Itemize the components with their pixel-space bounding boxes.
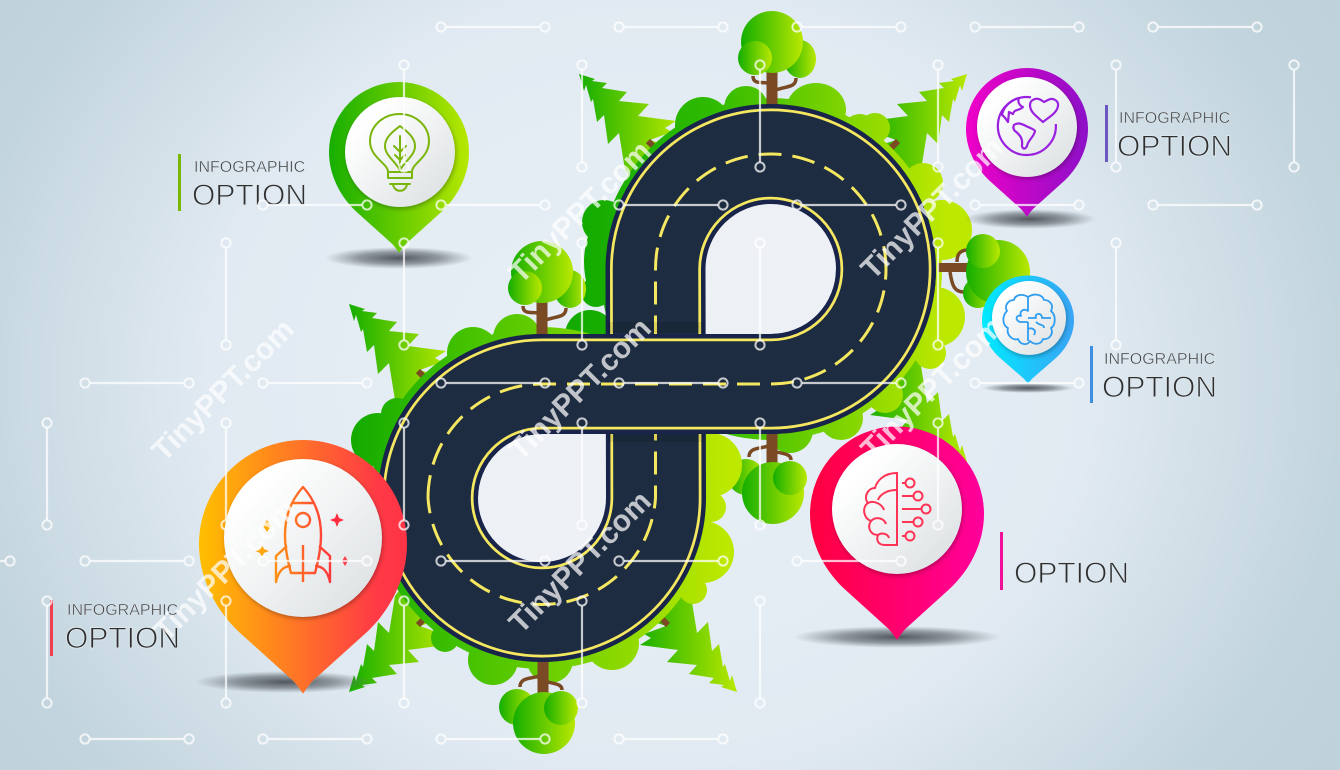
accent bar [1105, 105, 1108, 162]
scenery: lower cluster of pines, bushes and trees [349, 241, 742, 754]
pine tree: lower right [866, 346, 967, 462]
icon: circuit brain [864, 473, 930, 545]
pin shadow [793, 626, 1001, 648]
label: pink option [1000, 532, 1129, 590]
heading: OPTION [1117, 130, 1232, 163]
pin disc [832, 444, 962, 574]
pin: cyan with brain puzzle icon [982, 276, 1074, 393]
heading: OPTION [1102, 371, 1217, 404]
pin disc [992, 281, 1066, 355]
label: magenta option [1105, 105, 1232, 163]
heading: OPTION [65, 622, 180, 655]
label: orange option [50, 600, 180, 656]
heading: OPTION [1014, 557, 1129, 590]
pin disc [345, 97, 455, 207]
watermarks [146, 131, 1010, 648]
tree: lower middle [728, 428, 807, 524]
pin body [329, 82, 469, 253]
heading: OPTION [192, 179, 307, 212]
bushes: upper cluster [565, 83, 972, 453]
pin: orange with rocket icon [195, 440, 407, 694]
accent bar [50, 600, 53, 656]
pin: magenta with earth and heart icon [964, 68, 1096, 229]
label: cyan option [1090, 346, 1217, 404]
pin shadow [325, 247, 473, 269]
caption: INFOGRAPHIC [1104, 351, 1215, 368]
watermarks: TinyPPT.com [503, 485, 658, 640]
pin body [982, 276, 1074, 384]
road: underpass segment [428, 154, 886, 612]
watermarks: TinyPPT.com [148, 493, 303, 648]
pine tree: upper right [866, 74, 967, 190]
pin body [966, 68, 1088, 217]
pin body [199, 440, 407, 694]
icon: rocket [276, 487, 330, 582]
pin disc [977, 77, 1077, 177]
bushes: lower cluster [351, 314, 742, 685]
icon: brain puzzle [1003, 295, 1055, 344]
road: overpass segment [428, 269, 886, 498]
pin: pink with circuit brain icon [793, 426, 1001, 648]
icon: sparkles [255, 513, 348, 566]
caption: INFOGRAPHIC [194, 159, 305, 176]
tree: top [738, 11, 816, 110]
pin disc [224, 459, 382, 617]
caption: INFOGRAPHIC [1119, 110, 1230, 127]
pine tree: bottom left [349, 576, 450, 692]
tree: bottom [499, 658, 578, 754]
pin shadow [982, 383, 1074, 393]
label: green option [178, 154, 307, 212]
watermarks: TinyPPT.com [855, 311, 1010, 466]
accent bar [178, 154, 181, 211]
watermarks: TinyPPT.com [503, 312, 658, 467]
pine tree: upper left [579, 74, 680, 190]
icon: light bulb with leaf [370, 114, 429, 191]
tree: upper left [508, 241, 586, 340]
accent bar [1000, 532, 1003, 590]
watermarks: TinyPPT.com [146, 313, 301, 468]
road: figure-eight track [428, 154, 886, 612]
pin: green with bulb icon [325, 82, 473, 269]
pin body [810, 426, 984, 640]
icon: earth with heart [998, 97, 1058, 155]
crossing shade [608, 322, 705, 442]
watermarks: TinyPPT.com [503, 135, 658, 290]
pine tree: bottom right [636, 576, 737, 692]
tree: right [938, 234, 1030, 308]
pin shadow [964, 209, 1096, 229]
watermarks: TinyPPT.com [855, 131, 1010, 286]
scenery: upper cluster of pines, bushes and trees [565, 11, 1030, 524]
loop interiors [428, 154, 886, 612]
pine tree: left [349, 304, 450, 420]
accent bar [1090, 346, 1093, 403]
pin shadow [195, 671, 375, 693]
caption: INFOGRAPHIC [67, 602, 178, 619]
